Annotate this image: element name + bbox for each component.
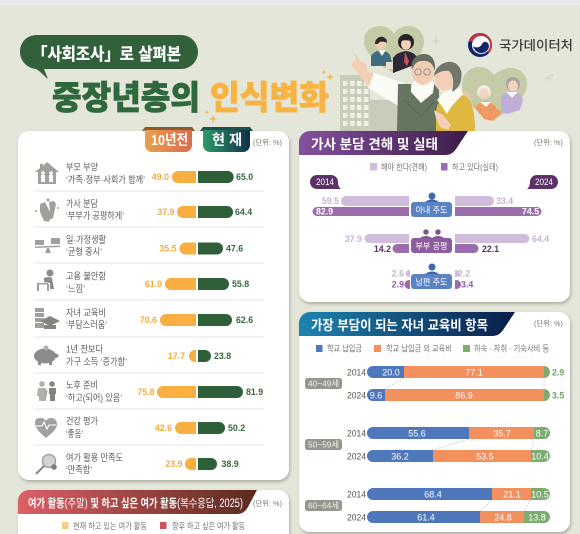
age group: 40-49 <box>305 366 564 401</box>
age group: 50-59 <box>305 427 550 462</box>
row: retirement preparation: 81.9 <box>246 387 263 397</box>
age group: 50-59: 2024 <box>347 452 366 462</box>
age group: 50-59: 53.5 <box>476 452 494 462</box>
row: job insecurity <box>37 270 249 295</box>
tab: 10 years ago <box>142 127 195 152</box>
row: housework sharing: 64.4 <box>235 207 252 217</box>
age group: 60-64: 2014 <box>347 490 366 500</box>
row separators <box>33 190 264 446</box>
heading: housework sharing: 가사 분담 견해 및 실태 <box>311 137 438 152</box>
age group: 40-49: 9.6 <box>370 390 382 400</box>
row: retirement preparation: ‘하고(되어) 있음’ <box>66 392 122 404</box>
row: work-life balance: 35.5 <box>159 244 177 254</box>
age group: 40-49: 2024 <box>347 390 366 400</box>
row: work-life balance: ‘균형 중시’ <box>66 247 102 258</box>
title <box>52 79 329 116</box>
title: 인식변화 <box>210 79 329 116</box>
row: health: 건강 평가 <box>66 416 98 428</box>
age group: 60-64: 60~64세 <box>308 500 339 510</box>
row: education cost burden: 자녀 교육비 <box>66 308 106 319</box>
age group: 50-59: 10.4 <box>531 452 549 462</box>
row: education cost burden <box>35 308 253 331</box>
age group: 60-64: 2024 <box>347 512 366 522</box>
row: household income: 23.8 <box>214 351 231 361</box>
legend: 하숙 · 자취 · 기숙사비 등 <box>474 344 549 354</box>
row: job insecurity: 55.8 <box>232 279 249 289</box>
legend: 현재 하고 있는 여가 활동 <box>73 521 147 531</box>
legend: 향후 하고 싶은 여가 활동 <box>172 521 245 531</box>
age group: 50-59: 8.7 <box>536 428 548 438</box>
row: health: 42.6 <box>155 423 172 433</box>
age group: 60-64: 10.5 <box>531 490 549 500</box>
heading: housework sharing <box>299 131 468 155</box>
age group: 40-49: 3.5 <box>552 390 564 400</box>
age group: 60-64: 13.8 <box>528 512 546 522</box>
age group: 50-59: 36.2 <box>391 452 409 462</box>
tab: 10 years ago: 10년전 <box>151 132 188 149</box>
panel: housework sharing <box>299 131 570 302</box>
row: parental support: 65.0 <box>236 172 253 182</box>
row: household income: 1년 전보다 <box>66 344 103 356</box>
age group: 40-49: 2.9 <box>552 368 564 378</box>
age group: 40-49: 77.1 <box>465 368 483 378</box>
row: parental support <box>35 162 253 186</box>
row: parental support: 부모 부양 <box>66 162 98 174</box>
age group: 50-59: 2014 <box>347 428 366 438</box>
row: leisure satisfaction <box>36 452 239 476</box>
year tag 2014 <box>310 175 341 189</box>
age group: 40-49: 40~49세 <box>308 378 339 388</box>
legend <box>316 344 549 354</box>
unit: (단위: %) <box>534 318 563 328</box>
chart: husband-led: 2.2 <box>458 268 470 278</box>
heading: leisure activities <box>18 490 257 514</box>
legend <box>62 521 245 531</box>
year tag 2024: 2024 <box>535 177 553 187</box>
chart: shared equally <box>345 229 549 254</box>
chart: shared equally: 22.1 <box>482 244 499 254</box>
row: retirement preparation <box>37 380 263 404</box>
chart: husband-led: 2.6 <box>392 268 404 278</box>
row: parental support: 49.0 <box>152 172 169 182</box>
row: work-life balance <box>35 234 243 258</box>
row: health: 50.2 <box>228 423 245 433</box>
legend: 해야 한다(견해) <box>381 162 427 172</box>
chart: wife-led: 82.9 <box>316 206 333 216</box>
legend <box>370 162 498 172</box>
age group: 60-64: 68.4 <box>424 490 442 500</box>
age group: 40-49: 2014 <box>347 368 366 378</box>
chart: husband-led: 2.9 <box>392 280 404 290</box>
illustration: pointing senior couple with hearts <box>340 26 527 131</box>
row: retirement preparation: 노후 준비 <box>66 380 98 392</box>
heading: education cost items <box>299 312 515 336</box>
row: work-life balance: 일·가정생활 <box>66 234 106 246</box>
row: education cost burden: 62.6 <box>236 315 253 325</box>
row: work-life balance: 47.6 <box>226 244 243 254</box>
chart: husband-led: 3.4 <box>461 280 473 290</box>
age group: 50-59: 35.7 <box>493 428 511 438</box>
row: housework sharing: ‘부부가 공평하게’ <box>66 210 124 222</box>
row: household income <box>34 344 231 368</box>
panel: leisure activities <box>18 490 289 534</box>
row: household income: 17.7 <box>168 351 185 361</box>
legend: 학교 납입금 <box>327 344 362 354</box>
chart: shared equally: 64.4 <box>532 234 549 244</box>
year tag 2014: 2014 <box>316 177 334 187</box>
age group: 60-64 <box>305 488 550 523</box>
row: job insecurity: ‘느낌’ <box>66 283 85 295</box>
unit: (단위: %) <box>253 498 282 508</box>
age group: 60-64: 61.4 <box>417 512 435 522</box>
row: leisure satisfaction: ‘만족함’ <box>66 465 92 476</box>
chart: wife-led: 아내 주도 <box>416 205 448 215</box>
age group: 40-49: 86.9 <box>455 390 473 400</box>
year tag 2024 <box>527 175 558 189</box>
chart: wife-led: 59.5 <box>322 196 339 206</box>
panel: education cost items <box>299 312 570 532</box>
logo: 국가데이터처 <box>468 33 573 57</box>
chart: shared equally: 부부 공평 <box>416 241 448 251</box>
row: education cost burden: 70.6 <box>140 315 157 325</box>
unit: (단위: %) <box>534 137 563 147</box>
speech bubble subtitle: 「사회조사」로 살펴본 <box>32 45 181 64</box>
row: retirement preparation: 75.8 <box>137 387 155 397</box>
chart: shared equally: 37.9 <box>345 234 362 244</box>
row: housework sharing: 가사 분담 <box>66 198 98 210</box>
row: household income: 가구 소득 ‘증가함’ <box>66 357 127 368</box>
row: education cost burden: ‘부담스러움’ <box>66 319 107 331</box>
chart: wife-led: 33.4 <box>496 196 513 206</box>
age group: 50-59: 55.6 <box>408 428 426 438</box>
speech bubble subtitle <box>20 35 198 79</box>
heading: education cost items: 가장 부담이 되는 자녀 교육비 항목 <box>311 318 488 333</box>
age group: 50-59: 50~59세 <box>308 440 339 450</box>
row: leisure satisfaction: 38.9 <box>222 459 239 469</box>
title: 중장년층의 <box>52 79 200 116</box>
heading: leisure activities: 여가 활동(주말) 및 하고 싶은 여가 활동(복수응답, 2025) <box>28 496 243 510</box>
chart: wife-led <box>312 192 542 217</box>
row: health: ‘좋음’ <box>66 429 83 440</box>
chart: shared equally: 14.2 <box>374 244 391 254</box>
row: leisure satisfaction: 여가 활용 만족도 <box>66 452 123 464</box>
tab: now <box>200 127 253 152</box>
age group: 60-64: 24.8 <box>494 512 512 522</box>
row: job insecurity: 고용 불안함 <box>66 272 106 282</box>
panel: perception changes <box>18 127 289 480</box>
row: parental support: ‘가족·정부·사회가 함께’ <box>66 175 145 186</box>
chart: husband-led <box>392 264 473 290</box>
legend: 학교 납입금 외 교육비 <box>386 344 452 354</box>
row: leisure satisfaction: 23.9 <box>165 459 183 469</box>
logo: 국가데이터처: 국가데이터처 <box>499 38 573 53</box>
age group: 40-49: 20.0 <box>382 368 400 378</box>
row: housework sharing <box>35 198 252 222</box>
chart: wife-led: 74.5 <box>522 206 539 216</box>
row: job insecurity: 61.0 <box>145 279 162 289</box>
chart: husband-led: 남편 주도 <box>416 276 448 287</box>
age group: 60-64: 21.1 <box>503 490 521 500</box>
tab: now: 현 재 <box>212 132 242 149</box>
decorative sparkles <box>205 36 554 123</box>
row: health <box>35 416 245 440</box>
row: housework sharing: 37.9 <box>157 207 175 217</box>
legend: 하고 있다(실태) <box>452 162 498 172</box>
unit: (단위: %) <box>253 137 282 147</box>
